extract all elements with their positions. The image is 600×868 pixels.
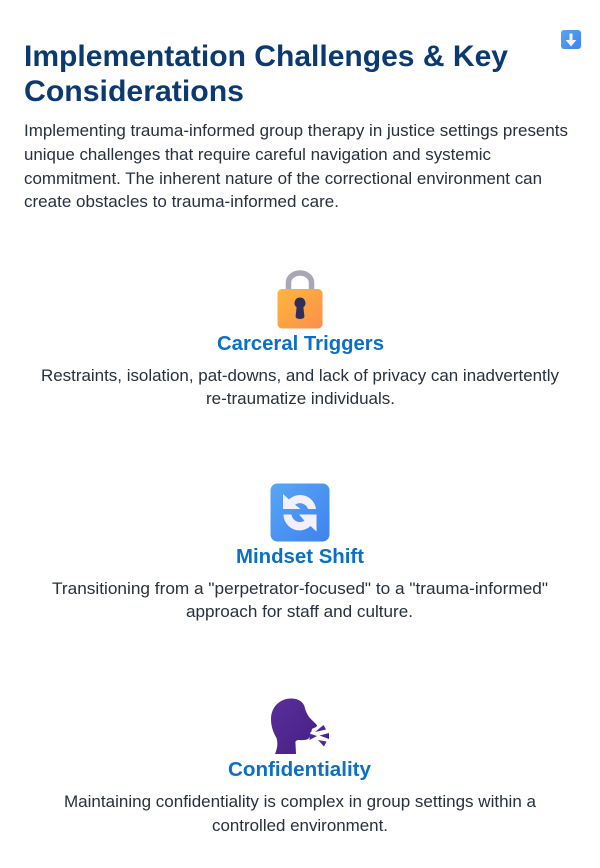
panel: carceral triggers bbox=[41, 273, 560, 408]
text: mindset shift description: approach for staff and culture. bbox=[186, 603, 413, 621]
text: confidentiality description: Maintaining confidentiality is complex in group settings within a bbox=[64, 793, 537, 811]
heading: confidentiality: Confidentiality bbox=[228, 759, 372, 781]
heading: carceral triggers: Carceral Triggers bbox=[217, 333, 384, 355]
panel: mindset shift bbox=[52, 484, 548, 621]
icon: down arrow button bbox=[561, 30, 581, 49]
text: confidentiality description bbox=[64, 793, 537, 835]
text: carceral triggers description bbox=[41, 367, 560, 408]
heading: mindset shift: Mindset Shift bbox=[236, 546, 364, 568]
text: mindset shift description: Transitioning from a "perpetrator-focused" to a "trauma-informed" bbox=[52, 580, 548, 598]
icon: refresh arrows bbox=[270, 484, 330, 542]
icon: speaking head bbox=[271, 698, 329, 754]
intro paragraph: create obstacles to trauma-informed care. bbox=[24, 193, 339, 211]
text: confidentiality description: controlled environment. bbox=[212, 817, 388, 835]
intro paragraph: Implementing trauma-informed group therapy in justice settings presents bbox=[24, 122, 568, 140]
panel: confidentiality bbox=[64, 698, 537, 835]
intro paragraph bbox=[24, 122, 568, 211]
title: Considerations bbox=[24, 75, 244, 108]
intro paragraph: commitment. The inherent nature of the correctional environment can bbox=[24, 170, 542, 188]
text: carceral triggers description: re-traumatize individuals. bbox=[206, 390, 395, 408]
intro paragraph: unique challenges that require careful navigation and systemic bbox=[24, 146, 491, 164]
title: Implementation Challenges & Key bbox=[24, 40, 508, 73]
text: mindset shift description bbox=[52, 580, 548, 621]
title bbox=[24, 40, 508, 108]
text: carceral triggers description: Restraints, isolation, pat-downs, and lack of privacy can inadvertently bbox=[41, 367, 560, 385]
icon: padlock bbox=[278, 273, 322, 328]
